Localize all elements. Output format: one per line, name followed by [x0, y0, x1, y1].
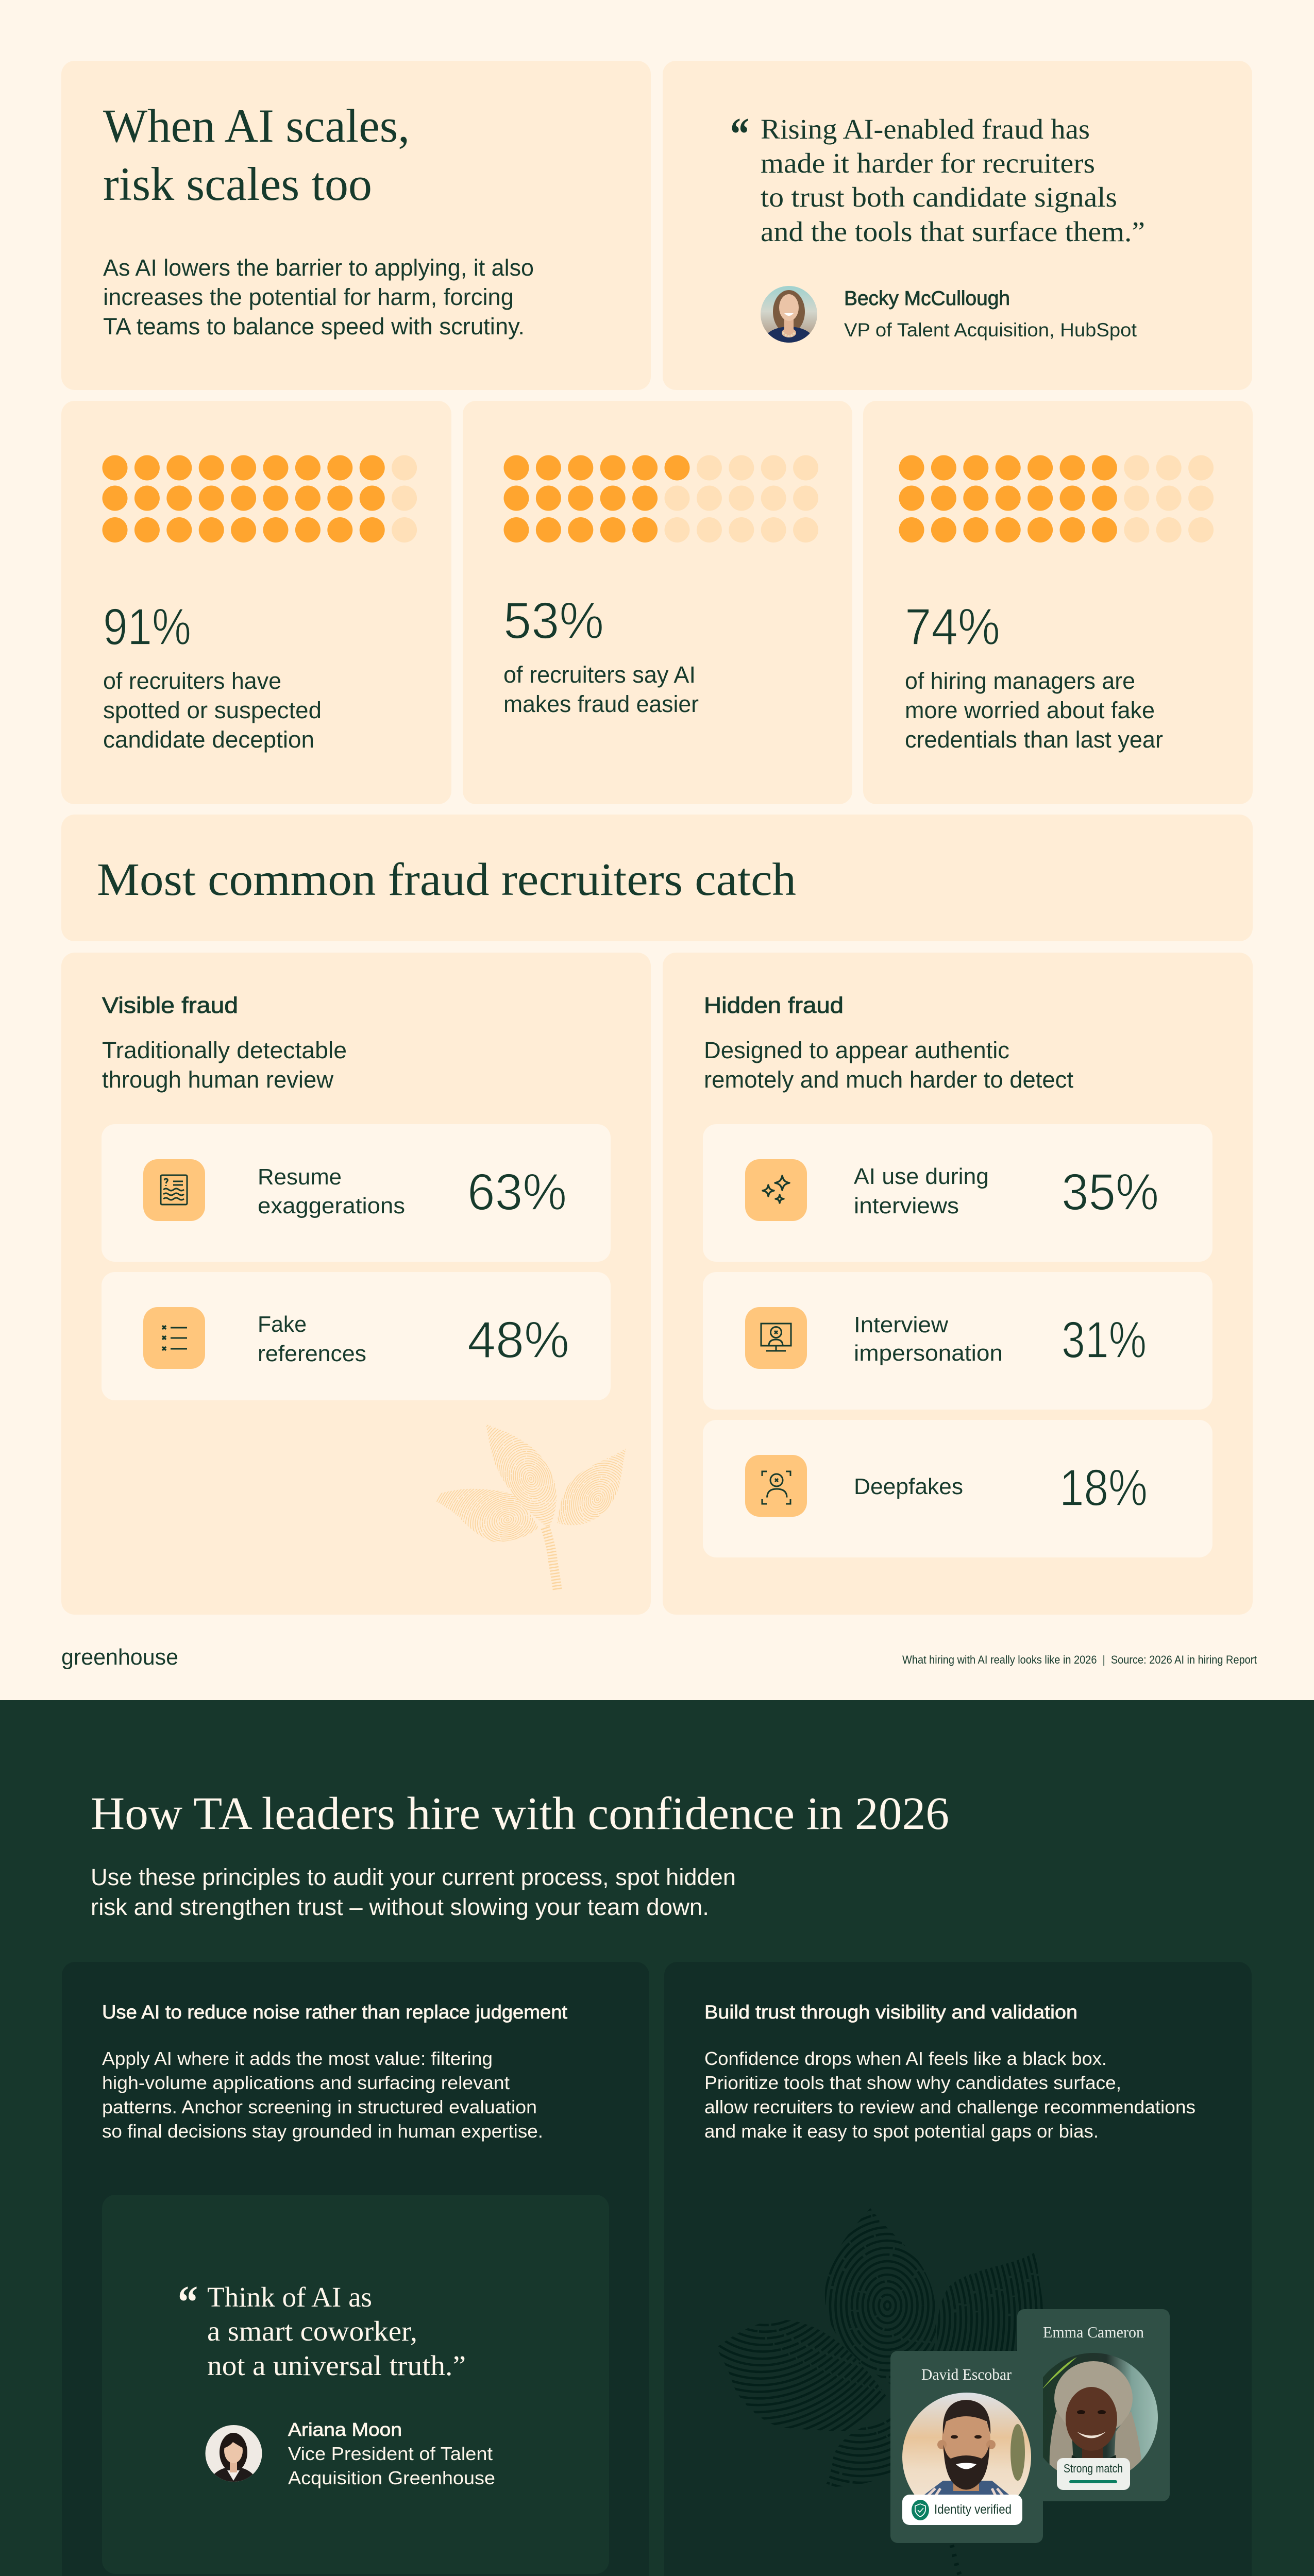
stat caption: hiring managers worried: of hiring managers are: [905, 668, 1135, 694]
text block: intro paragraph: As AI lowers the barrier to applying, it also: [103, 255, 534, 281]
panel: stat 91%: [61, 401, 451, 804]
decorative leaf: fingerprint: [718, 2208, 1157, 2575]
stat caption: hiring managers worried: more worried about fake: [905, 697, 1155, 723]
profile card: Emma Cameron: [1017, 2309, 1170, 2501]
portrait: Ariana Moon: [205, 2425, 262, 2482]
icon: sparkles: [745, 1159, 807, 1221]
footer: cream section: [61, 1643, 1257, 1676]
text block: build trust body: Prioritize tools that show why candidates surface,: [704, 2072, 1121, 2093]
panel: Becky McCullough quote: [663, 61, 1252, 390]
quote text: Think of AI as: [207, 2281, 372, 2313]
quote text: made it harder for recruiters: [761, 147, 1095, 179]
heading: when AI scales: [103, 99, 410, 210]
source note: What hiring with AI really looks like in 2026 | Source: 2026 AI in hiring Report: [902, 1653, 1257, 1666]
stat: 48%: 48%: [467, 1311, 569, 1369]
text block: intro paragraph: [103, 255, 534, 340]
panel: stat 53%: [463, 401, 852, 804]
heading: how TA leaders hire: How TA leaders hire with confidence in 2026: [91, 1788, 949, 1839]
text block: build trust body: and make it easy to spot potential gaps or bias.: [704, 2121, 1099, 2142]
panel: hidden fraud: [663, 953, 1253, 1615]
attribution: Becky McCullough: VP of Talent Acquisition, HubSpot: [844, 319, 1137, 341]
text block: hidden fraud description: remotely and much harder to detect: [704, 1066, 1073, 1093]
label: resume exaggerations: exaggerations: [258, 1193, 405, 1218]
label: fake references: Fake: [258, 1312, 307, 1337]
stat caption: recruiters deception: [103, 668, 322, 753]
stat number: 74%: 74%: [905, 598, 1000, 656]
dot chart: 53 percent: [516, 468, 806, 530]
attribution: Ariana Moon: [288, 2419, 495, 2488]
panel: most common fraud heading: [61, 815, 1253, 941]
row: interview impersonation: [703, 1272, 1212, 1410]
text block: build trust body: allow recruiters to review and challenge recommendations: [704, 2096, 1195, 2117]
label: resume exaggerations: [258, 1164, 405, 1218]
text block: section intro: [91, 1864, 736, 1920]
panel: visible fraud: [61, 953, 693, 1615]
stat caption: recruiters deception: of recruiters have: [103, 668, 281, 694]
text block: reduce noise body: patterns. Anchor screening in structured evaluation: [102, 2096, 537, 2117]
text block: build trust body: Confidence drops when AI feels like a black box.: [704, 2048, 1107, 2069]
label: interview impersonation: impersonation: [854, 1341, 1003, 1366]
label: fake references: [258, 1312, 366, 1366]
portrait: David Escobar: [902, 2393, 1031, 2524]
profile card: David Escobar: [890, 2351, 1043, 2543]
stat caption: hiring managers worried: [905, 668, 1163, 753]
stat: 31%: 31%: [1062, 1311, 1147, 1369]
text block: reduce noise body: Apply AI where it adds the most value: filtering: [102, 2048, 493, 2069]
attribution: Becky McCullough: [844, 287, 1137, 341]
heading: build trust: Build trust through visibility and validation: [704, 2002, 1077, 2023]
label: fake references: references: [258, 1341, 366, 1366]
badge: identity verified: [902, 2495, 1022, 2525]
quote text: not a universal truth.”: [207, 2350, 466, 2381]
portrait: Becky McCullough: [761, 286, 817, 343]
dot chart: 91 percent: [115, 468, 405, 530]
text block: visible fraud description: [102, 1037, 347, 1093]
quote mark: “: [730, 109, 749, 160]
attribution: Ariana Moon: Vice President of Talent: [288, 2443, 493, 2464]
badge: strong match: [1057, 2458, 1130, 2490]
attribution: Becky McCullough: Becky McCullough: [844, 287, 1010, 310]
candidate name: David Escobar: David Escobar: [921, 2365, 1012, 2383]
portrait: Emma Cameron: [1029, 2353, 1158, 2488]
quote text: to trust both candidate signals: [761, 181, 1117, 213]
text block: hidden fraud description: Designed to appear authentic: [704, 1037, 1009, 1063]
text block: build trust body: [704, 2048, 1195, 2142]
label: interview impersonation: [854, 1312, 1003, 1366]
quote text: [761, 113, 1145, 247]
stat: 18%: 18%: [1059, 1459, 1148, 1517]
row: deepfakes: [703, 1420, 1212, 1557]
stat number: 53%: 53%: [503, 592, 604, 650]
attribution: Ariana Moon: Ariana Moon: [288, 2419, 402, 2440]
label: AI use during interviews: AI use during: [854, 1164, 989, 1189]
row: AI use during interviews: [703, 1124, 1212, 1262]
row: resume exaggerations: [102, 1124, 611, 1262]
stat caption: recruiters deception: spotted or suspected: [103, 697, 322, 723]
quote text: Rising AI-enabled fraud has: [761, 113, 1090, 145]
stat caption: AI makes fraud easier: of recruiters say AI: [503, 662, 696, 688]
text block: reduce noise body: high-volume applications and surfacing relevant: [102, 2072, 510, 2093]
text block: reduce noise body: [102, 2048, 543, 2142]
quote text: a smart coworker,: [207, 2315, 417, 2347]
quote card: Ariana Moon: [102, 2195, 609, 2574]
text block: reduce noise body: so final decisions stay grounded in human expertise.: [102, 2121, 543, 2142]
decorative plant: fingerprint sprig: [436, 1424, 626, 1590]
text block: intro paragraph: TA teams to balance speed with scrutiny.: [103, 313, 525, 340]
stat caption: hiring managers worried: credentials than last year: [905, 726, 1163, 753]
logo: greenhouse: greenhouse: [61, 1645, 178, 1670]
stat caption: AI makes fraud easier: [503, 662, 699, 717]
label: AI use during interviews: [854, 1164, 989, 1218]
dark background section: [0, 1700, 1314, 2576]
panel: when AI scales intro: [61, 61, 651, 390]
heading: reduce noise: Use AI to reduce noise rather than replace judgement: [102, 2002, 568, 2023]
panel: use AI to reduce noise: [62, 1962, 649, 2576]
icon: shield check: [912, 2500, 929, 2520]
quote text: and the tools that surface them.”: [761, 216, 1145, 247]
heading: when AI scales: risk scales too: [103, 158, 372, 210]
icon: monitor with masked person: [745, 1307, 807, 1369]
icon: resume document: [143, 1159, 205, 1221]
heading: visible fraud: Visible fraud: [102, 993, 238, 1018]
attribution: Ariana Moon: Acquisition Greenhouse: [288, 2467, 495, 2488]
text block: section intro: risk and strengthen trust – without slowing your team down.: [91, 1894, 709, 1920]
stat number: 91%: 91%: [103, 598, 191, 656]
text block: hidden fraud description: [704, 1037, 1073, 1093]
panel: stat 74%: [863, 401, 1253, 804]
quote mark: “: [178, 2277, 198, 2328]
panel: build trust: [664, 1962, 1252, 2576]
stat caption: recruiters deception: candidate deception: [103, 726, 314, 753]
text block: visible fraud description: through human review: [102, 1066, 333, 1093]
text block: section intro: Use these principles to audit your current process, spot hidden: [91, 1864, 736, 1890]
dot chart: 74 percent: [912, 468, 1201, 530]
icon: face scan: [745, 1455, 807, 1517]
row: fake references: [102, 1272, 611, 1400]
label: interview impersonation: Interview: [854, 1312, 948, 1337]
heading: most common fraud: Most common fraud recruiters catch: [97, 854, 796, 905]
candidate name: Emma Cameron: Emma Cameron: [1043, 2323, 1144, 2341]
stat caption: AI makes fraud easier: makes fraud easier: [503, 691, 699, 717]
stat: 63%: 63%: [467, 1163, 567, 1221]
icon: checklist with crosses: [143, 1307, 205, 1369]
badge label: Identity verified: [934, 2502, 1012, 2517]
quote text: [207, 2281, 466, 2381]
heading: when AI scales: When AI scales,: [103, 99, 410, 152]
label: AI use during interviews: interviews: [854, 1193, 959, 1218]
text block: intro paragraph: increases the potential for harm, forcing: [103, 284, 514, 310]
stat: 35%: 35%: [1062, 1163, 1159, 1221]
label: deepfakes: Deepfakes: [854, 1474, 963, 1499]
heading: hidden fraud: Hidden fraud: [704, 993, 844, 1018]
cream background section: [0, 0, 1314, 1700]
badge: strong match: Strong match: [1064, 2462, 1123, 2475]
label: resume exaggerations: Resume: [258, 1164, 342, 1190]
text block: visible fraud description: Traditionally detectable: [102, 1037, 347, 1063]
